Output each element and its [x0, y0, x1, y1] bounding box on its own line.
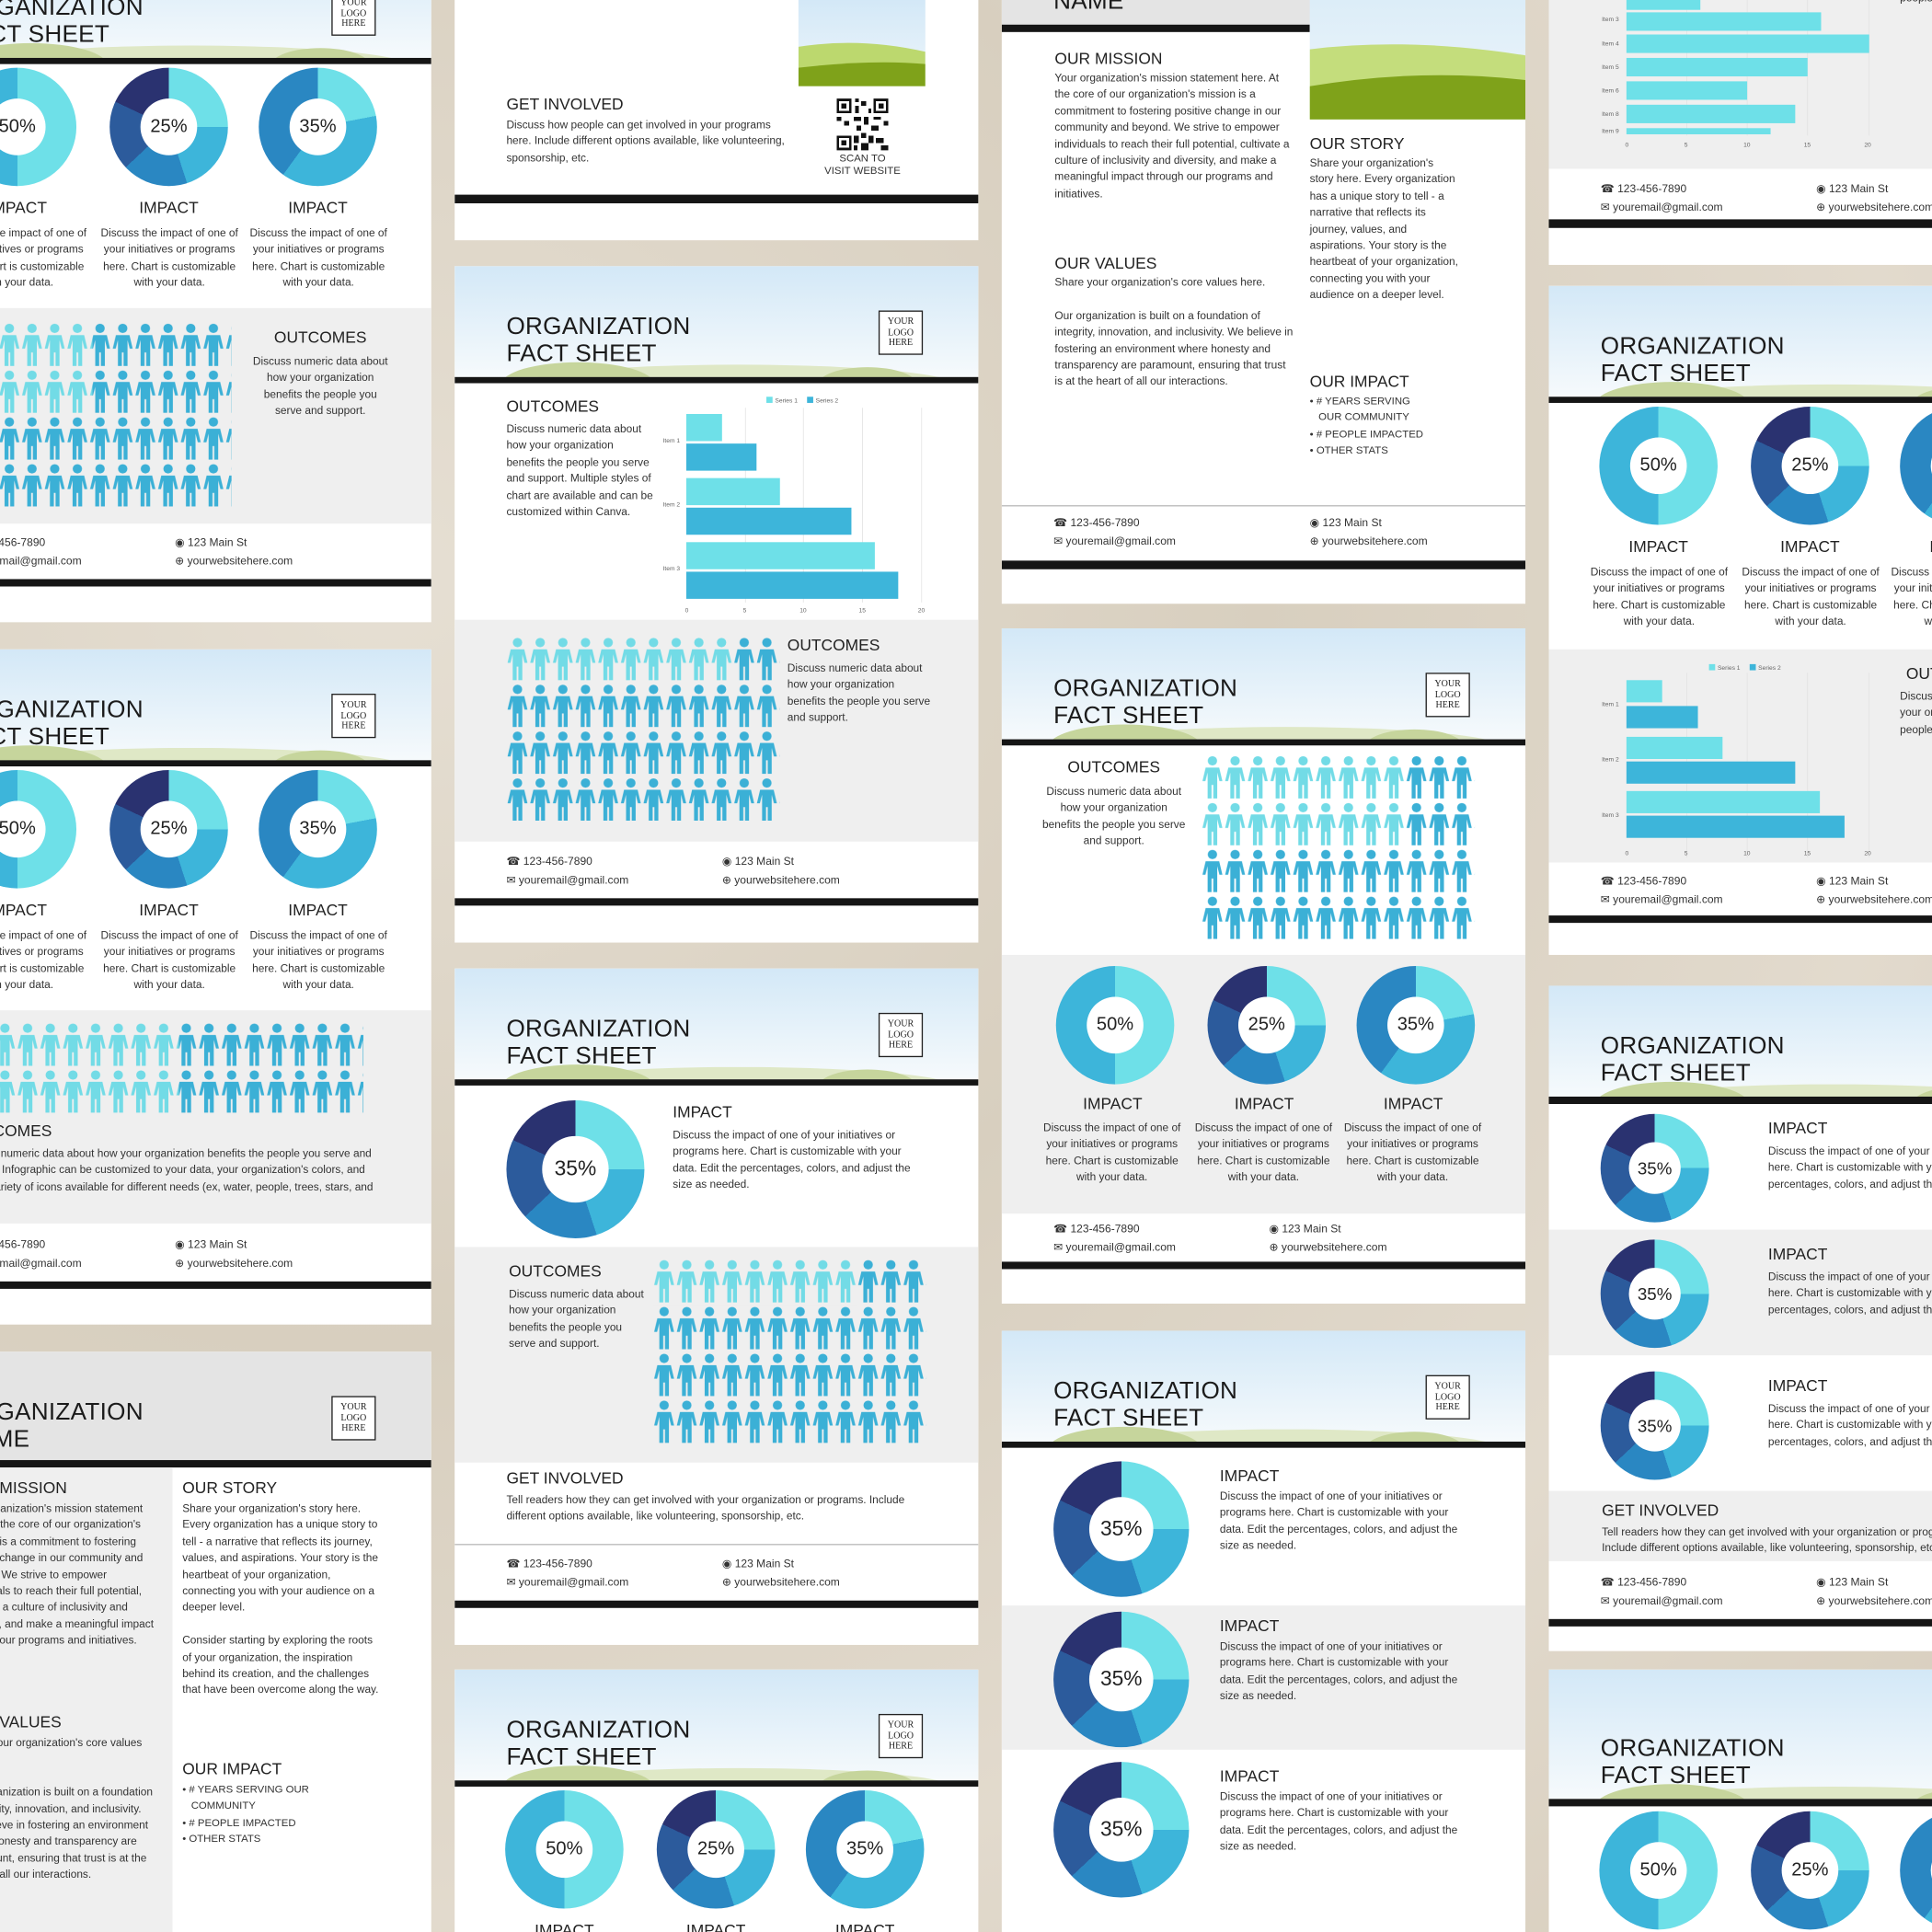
- card N: donuts bottom right: [1548, 1670, 1932, 1932]
- footer: ⊕ yourwebsitehere.com: [1816, 201, 1932, 213]
- donut 35: 35%: [299, 117, 337, 137]
- bar chart: Item 9: [1602, 129, 1619, 135]
- values: [0, 1713, 153, 1880]
- impact row 1: IMPACT: [1220, 1466, 1279, 1485]
- footer: ⊕ yourwebsitehere.com: [1816, 1594, 1932, 1606]
- bar chart: Item 3: [663, 566, 680, 572]
- impact texts: [1573, 537, 1932, 648]
- title: ORGANIZATION: [1601, 1032, 1785, 1060]
- header: [0, 0, 431, 58]
- footer: ✉ youremail@gmail.com: [1601, 1594, 1723, 1606]
- impact row 3: IMPACT: [1768, 1376, 1827, 1395]
- outcomes text: Discuss numeric data about how your organization benefits the people you serve and support. Multiple styles of chart are available and can be customized within Canva.: [506, 422, 653, 518]
- get involved: GET INVOLVED: [1602, 1501, 1719, 1519]
- impact row 2: Discuss the impact of one of your initiatives or programs here. Chart is customizable with your data. Edit the percentages, colors, and adjust the size as needed.: [1220, 1640, 1457, 1702]
- footer: ⊕ yourwebsitehere.com: [722, 1576, 840, 1588]
- footer: ✉ youremail@gmail.com: [506, 874, 628, 886]
- impact row 1: Discuss the impact of one of your initiatives or programs here. Chart is customizable with your data. Edit the percentages, colors, and adjust the size as needed.: [1220, 1489, 1457, 1551]
- title: [1601, 1735, 1785, 1789]
- impact texts: Discuss the impact of one of your initiatives or programs here. Chart is customizable with your data.: [250, 929, 387, 991]
- impact row 2: 35%: [1638, 1284, 1672, 1304]
- impact list: [182, 1760, 309, 1845]
- title: ORGANIZATION: [506, 313, 691, 340]
- impact texts: IMPACT: [139, 199, 199, 217]
- bar chart: Item 3: [1602, 17, 1619, 23]
- donuts: 35%: [299, 819, 337, 840]
- donuts: 25%: [1791, 455, 1829, 477]
- footer: ☎ 123-456-7890: [1601, 1576, 1686, 1588]
- impact list: • # YEARS SERVING OUR: [182, 1783, 309, 1795]
- get involved: Include different options available, like volunteering, sponsorship, etc.: [1602, 1542, 1932, 1554]
- logo: HERE: [889, 1740, 913, 1751]
- outcomes section: OUTCOMES: [274, 328, 367, 346]
- impact list: • # PEOPLE IMPACTED: [182, 1816, 296, 1828]
- footer: ⊕ yourwebsitehere.com: [175, 555, 293, 567]
- impact row 2: IMPACT: [1768, 1245, 1827, 1263]
- impact row 3: [1053, 1762, 1485, 1900]
- card G: donuts bottom: [454, 1670, 978, 1932]
- logo: LOGO: [340, 6, 366, 17]
- title: [506, 313, 691, 367]
- outcomes people section: OUTCOMES: [788, 636, 880, 654]
- logo: LOGO: [340, 709, 366, 720]
- donuts section: Discuss the impact of one of your initiatives or programs here. Chart is customizable with your data.: [1195, 1121, 1332, 1183]
- image: [799, 0, 926, 86]
- logo: [331, 0, 375, 36]
- logo: YOUR: [1434, 678, 1461, 689]
- title: ORGANIZATION: [1601, 333, 1785, 360]
- title: [1053, 675, 1237, 730]
- footer: [0, 1238, 293, 1270]
- mission: OUR MISSION: [1054, 50, 1162, 68]
- impact row 1: IMPACT: [1768, 1119, 1827, 1137]
- impact list: • # YEARS SERVING: [1310, 395, 1410, 407]
- impact row 2: [1053, 1612, 1457, 1748]
- header: [0, 650, 431, 760]
- card L: donuts + bar chart right: [1548, 286, 1932, 955]
- title: [0, 696, 144, 751]
- footer: ◉ 123 Main St: [1269, 1223, 1341, 1235]
- header: [454, 969, 978, 1079]
- footer: ◉ 123 Main St: [1816, 182, 1888, 195]
- logo: YOUR: [888, 316, 914, 327]
- footer: ✉ youremail@gmail.com: [1601, 201, 1723, 213]
- chart section: Series 2: [1758, 665, 1781, 672]
- footer: ✉ youremail@gmail.com: [1053, 535, 1176, 547]
- impact list: • OTHER STATS: [1310, 443, 1388, 456]
- impact row 2: IMPACT: [1220, 1616, 1279, 1635]
- title: ORGANIZATION: [506, 1717, 691, 1743]
- footer: [0, 536, 293, 567]
- footer: [1548, 182, 1932, 222]
- donuts: 35%: [846, 1839, 883, 1860]
- logo: LOGO: [340, 1411, 366, 1422]
- logo: YOUR: [888, 1719, 914, 1730]
- footer: ⊕ yourwebsitehere.com: [1269, 1241, 1386, 1253]
- impact texts: IMPACT: [1780, 537, 1840, 556]
- card J: three impact rows: [1002, 1330, 1525, 1932]
- outcomes people section: Discuss numeric data about how your organization benefits the people you serve and support.: [788, 661, 930, 723]
- story: Share your organization's story here. Every organization has a unique story to tell - a narrative that reflects its journey, values, and aspirations. Your story is the heartbeat of your organization, connecting you with your audience on a deeper level.: [1310, 156, 1458, 301]
- donuts section: 35%: [1397, 1015, 1434, 1036]
- donuts section: IMPACT: [1083, 1094, 1143, 1112]
- bar chart: 10: [799, 608, 807, 615]
- footer: ☎ 123-456-7890: [506, 855, 592, 868]
- impact texts: IMPACT: [288, 199, 348, 217]
- impact texts: IMPACT: [139, 901, 199, 919]
- logo: YOUR: [1434, 1380, 1461, 1391]
- impact list: [1310, 372, 1423, 456]
- logo: [1426, 1375, 1470, 1420]
- bar chart: 15: [1804, 142, 1811, 148]
- outcomes text: OUTCOMES: [1067, 758, 1160, 776]
- outcomes section: OUTCOMES: [509, 1261, 602, 1281]
- footer: ☎ 123-456-7890: [506, 1558, 592, 1570]
- impact row 1: [1601, 1114, 1932, 1225]
- title: ORGANIZATION: [1053, 1377, 1237, 1405]
- footer: [506, 855, 840, 886]
- title: [0, 1398, 144, 1453]
- title: ORGANIZATION: [1601, 1735, 1785, 1762]
- footer: ◉ 123 Main St: [175, 1238, 247, 1250]
- donuts: [1599, 407, 1932, 525]
- donuts: 25%: [697, 1839, 734, 1860]
- story: [182, 1478, 378, 1696]
- impact row 2: 35%: [1100, 1667, 1143, 1690]
- title: ORGANIZATION: [1053, 675, 1237, 702]
- chart section: 5: [1685, 850, 1688, 857]
- title: FACT SHEET: [1601, 1762, 1751, 1789]
- impact list: OUR IMPACT: [182, 1760, 282, 1778]
- donut 25: 25%: [150, 117, 188, 137]
- header: [1548, 286, 1932, 397]
- impact row 3: 35%: [1100, 1817, 1143, 1841]
- bar chart: 0: [1626, 142, 1629, 148]
- impact texts: Discuss the impact of one of your initiatives or programs here. Chart is customizable with your data.: [1742, 566, 1880, 627]
- logo: HERE: [341, 719, 365, 730]
- qr code: VISIT WEBSITE: [824, 164, 901, 177]
- get involved: GET INVOLVED: [506, 95, 624, 113]
- title: [1601, 1032, 1785, 1087]
- impact text: IMPACT: [673, 1103, 732, 1121]
- impact texts: Discuss the impact of one of your initiatives or programs here. Chart is customizable with your data.: [100, 929, 238, 991]
- title: [506, 1717, 691, 1771]
- title: FACT SHEET: [506, 1743, 657, 1771]
- chart section: Item 1: [1602, 701, 1619, 707]
- footer: [506, 1558, 840, 1588]
- logo: HERE: [1436, 1401, 1460, 1412]
- footer: ⊕ yourwebsitehere.com: [1310, 535, 1428, 547]
- title: FACT SHEET: [1601, 1060, 1751, 1087]
- impact row 3: Discuss the impact of one of your initiatives or programs here. Chart is customizable with your data. Edit the percentages, colors, and adjust the size as needed.: [1220, 1790, 1457, 1852]
- footer: ◉ 123 Main St: [1816, 1576, 1888, 1588]
- donuts: [505, 1790, 924, 1908]
- donut 50: [0, 68, 76, 186]
- donut 25: [109, 68, 228, 186]
- donuts section: [1002, 955, 1525, 1213]
- values: [1054, 254, 1293, 387]
- logo: HERE: [889, 1039, 913, 1050]
- outcomes section: Discuss numeric data about how your organization benefits the people you serve and support.: [253, 355, 388, 417]
- impact list: COMMUNITY: [191, 1800, 256, 1811]
- get involved: [506, 1468, 904, 1523]
- impact row 3: 35%: [1638, 1416, 1672, 1435]
- outcomes text: OUTCOMES: [506, 397, 599, 415]
- logo: [879, 1013, 923, 1057]
- donuts: 50%: [1640, 1860, 1677, 1880]
- footer: [1053, 516, 1428, 547]
- footer: ◉ 123 Main St: [722, 1558, 794, 1570]
- get involved: Discuss how people can get involved in your programs here. Include different options available, like volunteering, sponsorship, etc.: [506, 119, 785, 164]
- logo: [331, 1396, 375, 1441]
- chart section: Item 3: [1602, 812, 1619, 819]
- impact texts: Discuss the impact of one of your initiatives or programs here. Chart is customizable with your data.: [100, 226, 238, 289]
- people chart: [1202, 756, 1476, 939]
- footer: ☎ 123-456-7890: [1601, 875, 1686, 887]
- logo: HERE: [889, 337, 913, 348]
- logo: [1426, 673, 1470, 717]
- bar chart: [1598, 0, 1906, 154]
- donuts: 25%: [1791, 1860, 1829, 1880]
- donuts: 25%: [150, 819, 188, 840]
- logo: [331, 694, 375, 738]
- footer: [1548, 1576, 1932, 1616]
- card K: bar chart top right: [1548, 0, 1932, 265]
- impact headings: [535, 1921, 894, 1932]
- bar chart: Item 6: [1602, 87, 1619, 94]
- impact text: Discuss the impact of one of your initiatives or programs here. Chart is customizable with your data. Edit the percentages, colors, and adjust the size as needed.: [673, 1129, 911, 1190]
- impact row 1: [1053, 1461, 1457, 1597]
- card M: impact rows + get involved right: [1548, 985, 1932, 1651]
- bar chart: Item 5: [1602, 64, 1619, 71]
- impact texts: IMPACT: [1628, 537, 1688, 556]
- impact list: • OTHER STATS: [182, 1833, 260, 1845]
- logo: HERE: [1436, 698, 1460, 709]
- outcomes section: [0, 1010, 431, 1224]
- title: FACT SHEET: [506, 1042, 657, 1070]
- impact texts: Discuss the impact of one of your initiatives or programs here. Chart is customizable with your data.: [1591, 566, 1728, 627]
- bar chart: Series 1: [775, 397, 798, 404]
- footer: ✉ youremail@gmail.com: [1053, 1241, 1176, 1253]
- bar chart: 0: [685, 608, 689, 615]
- card B: fact sheet donuts and outcomes: [0, 650, 431, 1325]
- bar chart: 10: [1743, 142, 1751, 148]
- chart section: 0: [1626, 850, 1629, 857]
- bar chart: 20: [918, 608, 925, 615]
- story: OUR STORY: [182, 1478, 277, 1497]
- logo: LOGO: [888, 1730, 914, 1741]
- footer: ✉ youremail@gmail.com: [506, 1576, 628, 1588]
- get involved: GET INVOLVED: [506, 1468, 624, 1488]
- donuts section: 50%: [1097, 1015, 1133, 1036]
- donuts: 50%: [546, 1839, 582, 1860]
- bar chart: 5: [1685, 142, 1688, 148]
- footer: ◉ 123 Main St: [1310, 516, 1382, 529]
- bar chart: Item 4: [1602, 41, 1619, 48]
- impact row 1: 35%: [1638, 1158, 1672, 1178]
- header: [1002, 0, 1525, 25]
- impact row 3: IMPACT: [1220, 1767, 1279, 1786]
- card C: organization name: [0, 1351, 431, 1932]
- outcomes people section: [454, 620, 978, 842]
- logo: LOGO: [888, 1029, 914, 1040]
- chart section: 15: [1804, 850, 1811, 857]
- footer: ⊕ yourwebsitehere.com: [722, 874, 840, 886]
- impact row 3: [1601, 1372, 1932, 1482]
- logo: LOGO: [888, 326, 914, 337]
- title: [0, 0, 144, 48]
- logo: LOGO: [1435, 1390, 1461, 1401]
- logo: [879, 311, 923, 355]
- card H: organization name mission: [1002, 0, 1525, 604]
- chart section: [1548, 650, 1932, 863]
- header: [1548, 985, 1932, 1097]
- outcomes section: [454, 1247, 978, 1463]
- header: [1002, 1330, 1525, 1442]
- impact texts: [0, 199, 387, 289]
- outcomes text: [1042, 758, 1185, 846]
- donuts section: 25%: [1248, 1015, 1285, 1036]
- chart section: 20: [1864, 850, 1871, 857]
- bar chart: Series 2: [816, 397, 838, 404]
- title: ORGANIZATION: [506, 1016, 691, 1042]
- logo: HERE: [341, 1422, 365, 1433]
- mission: Your organization's mission statement here. At the core of our organization's mission is a commitment to fostering positive change in our community and beyond. We strive to empower individuals to reach their full potential, cultivate a culture of inclusivity and diversity, and make a meaningful impact through our programs and initiatives.: [1054, 72, 1289, 200]
- card F: impact + outcomes + get involved: [454, 969, 978, 1645]
- qr code: SCAN TO: [839, 152, 886, 164]
- footer: ◉ 123 Main St: [175, 536, 247, 548]
- chart section: Series 1: [1718, 665, 1741, 672]
- impact row 1: 35%: [1100, 1517, 1143, 1540]
- title: FACT SHEET: [1053, 1405, 1203, 1432]
- bar chart: [663, 397, 925, 615]
- logo: LOGO: [1435, 688, 1461, 699]
- impact texts: IMPACT: [288, 901, 348, 919]
- title: FACT SHEET: [1053, 702, 1203, 730]
- donut 35 large: 35%: [555, 1157, 596, 1180]
- people chart: [0, 1023, 363, 1113]
- card E: outcomes bar chart: [454, 266, 978, 943]
- footer: [1053, 1223, 1386, 1253]
- logo: [879, 1714, 923, 1758]
- donuts: [0, 770, 377, 889]
- bar chart: Item 2: [663, 501, 680, 508]
- bar chart: Item 1: [663, 438, 680, 444]
- footer: ☎ 123-456-7890: [1601, 182, 1686, 195]
- header: [454, 1670, 978, 1780]
- logo: YOUR: [340, 1401, 367, 1412]
- impact texts: Discuss the impact of one of your initiatives or programs here. Chart is customizable with your data.: [250, 226, 387, 289]
- chart section: 10: [1743, 850, 1751, 857]
- people chart: [0, 324, 232, 506]
- impact list: • # PEOPLE IMPACTED: [1310, 427, 1423, 440]
- values: Our organization is built on a foundation of integrity, innovation, and inclusivity. We believe in fostering an environment where honesty and transparency are paramount, ensuring that trust is at the heart of all our interactions.: [1054, 309, 1293, 387]
- bar chart: 20: [1864, 142, 1871, 148]
- donut 35 large: [506, 1100, 644, 1238]
- footer: [1548, 875, 1932, 914]
- impact list: OUR IMPACT: [1310, 372, 1409, 391]
- footer: ◉ 123 Main St: [1816, 875, 1888, 887]
- story: Share your organization's story here. Every organization has a unique story to tell - a narrative that reflects its journey, values, and aspirations. Your story is the heartbeat of your organization, connecting you with your audience on a deeper level.: [182, 1502, 378, 1614]
- card D: get involved: [454, 0, 978, 240]
- get involved: [1602, 1501, 1932, 1557]
- title: FACT SHEET: [506, 340, 657, 367]
- bar chart: 5: [743, 608, 747, 615]
- outcomes text: Discuss numeric data about how your organization benefits the people you serve and support.: [1042, 785, 1185, 846]
- footer: ✉ youremail@gmail.com: [1601, 893, 1723, 905]
- logo: YOUR: [888, 1018, 914, 1029]
- card A: fact sheet donuts: [0, 0, 431, 622]
- donuts: 50%: [1640, 455, 1677, 477]
- footer: ☎ 123-456-7890: [1053, 516, 1140, 529]
- get involved: [506, 95, 785, 164]
- header: [1002, 628, 1525, 740]
- qr code: [824, 98, 901, 177]
- get involved: Tell readers how they can get involved with your organization or programs. Include different options available, like volunteering, sponsorship, etc.: [506, 1493, 904, 1523]
- story: Consider starting by exploring the roots of your organization, the inspiration behind its creation, and the challenges that have been overcome along the way.: [182, 1634, 378, 1696]
- donuts section: Discuss the impact of one of your initiatives or programs here. Chart is customizable with your data.: [1043, 1121, 1180, 1183]
- donut 35: [259, 68, 377, 186]
- title: [1601, 333, 1785, 387]
- logo: YOUR: [340, 698, 367, 709]
- impact list: OUR COMMUNITY: [1318, 411, 1409, 423]
- card I: outcomes people + donuts: [1002, 628, 1525, 1304]
- values: Share your organization's core values here.: [1054, 276, 1265, 288]
- logo: HERE: [341, 17, 365, 29]
- header: [454, 266, 978, 377]
- donuts section: IMPACT: [1384, 1094, 1443, 1112]
- header: [0, 1351, 431, 1463]
- donuts section: Discuss the impact of one of your initiatives or programs here. Chart is customizable with your data.: [1344, 1121, 1481, 1183]
- title: FACT SHEET: [1601, 360, 1751, 387]
- outcomes section: Discuss numeric data about how your organization benefits the people you serve and support.: [509, 1288, 644, 1350]
- header: [1548, 1670, 1932, 1799]
- title: [1053, 1377, 1237, 1432]
- donuts: [1599, 1811, 1932, 1929]
- impact row 2: [1601, 1239, 1932, 1351]
- footer: ◉ 123 Main St: [722, 855, 794, 868]
- footer: ☎ 123-456-7890: [1053, 1223, 1140, 1235]
- footer: ⊕ yourwebsitehere.com: [175, 1257, 293, 1269]
- bar chart: Item 8: [1602, 111, 1619, 118]
- story: OUR STORY: [1310, 134, 1405, 153]
- donuts section: IMPACT: [1235, 1094, 1294, 1112]
- footer: ⊕ yourwebsitehere.com: [1816, 893, 1932, 905]
- bar chart: 15: [858, 608, 866, 615]
- values: OUR VALUES: [1054, 254, 1156, 272]
- chart section: Item 2: [1602, 757, 1619, 764]
- image: [1310, 0, 1525, 120]
- title: [506, 1016, 691, 1070]
- impact texts: [0, 901, 387, 991]
- outcomes section: [0, 308, 431, 523]
